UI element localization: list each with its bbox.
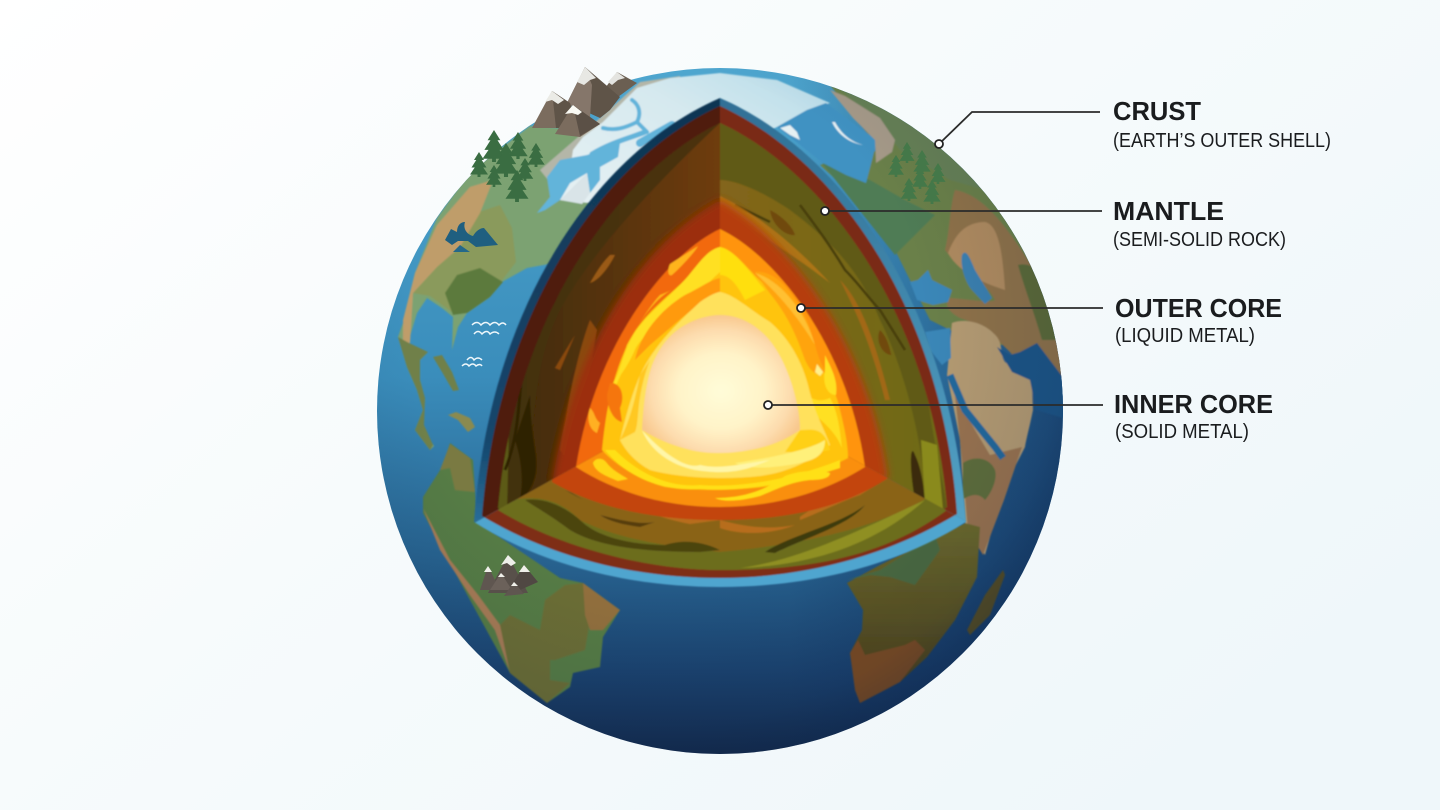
icon: mountains south america (480, 555, 538, 596)
yellow ring (602, 247, 848, 490)
land: Madagascar (967, 570, 1005, 635)
icon: wave symbol (445, 222, 498, 252)
land: grey ridge (830, 90, 895, 163)
land: South America (423, 443, 620, 703)
land: Africa (847, 523, 980, 703)
label: mantle: MANTLE (1113, 196, 1224, 226)
sea: north (777, 103, 877, 183)
land: Eurasia (820, 86, 1032, 346)
inner core (642, 315, 800, 453)
label: outer core: OUTER CORE (1115, 293, 1282, 323)
land: tan plains (403, 180, 493, 343)
label: inner core: (SOLID METAL) (1115, 421, 1249, 443)
label: inner core: INNER CORE (1114, 389, 1273, 419)
land: dark plains (445, 268, 503, 315)
orange top streak (668, 246, 698, 275)
seas: inner and red sea (910, 270, 952, 305)
icon: trees asia (888, 142, 946, 204)
label: mantle (821, 196, 1286, 251)
orange pockets (607, 383, 622, 422)
outer core swirls (588, 246, 848, 501)
icon: trees north america (470, 130, 545, 202)
continents (398, 73, 1120, 703)
globe (377, 67, 1120, 754)
lake and rivers (537, 143, 620, 213)
label: crust: CRUST (1113, 96, 1201, 126)
yellow streaks (593, 459, 628, 481)
right wall (719, 97, 967, 522)
land: East Africa (955, 395, 1022, 555)
icon: water ripples (462, 322, 506, 366)
icon: mountains north (532, 67, 637, 137)
floor (474, 450, 966, 588)
ocean sphere (377, 68, 1063, 754)
cross-section cut (474, 98, 966, 587)
label: crust (935, 96, 1331, 152)
label: mantle: (SEMI-SOLID ROCK) (1113, 229, 1286, 251)
label: outer core: (LIQUID METAL) (1115, 325, 1255, 347)
sphere shading (377, 68, 1063, 754)
label: outer core (797, 293, 1282, 347)
land: brown steppe (944, 190, 1061, 376)
land: North America (398, 126, 600, 450)
land: ice sheet (560, 72, 830, 204)
left wall (473, 97, 721, 524)
pale inner ring (620, 292, 830, 478)
label: inner core (764, 389, 1273, 443)
land: Arabia and South Asia (947, 321, 1033, 555)
land: grey tundra (540, 75, 680, 179)
label: crust: (EARTH’S OUTER SHELL) (1113, 130, 1331, 152)
